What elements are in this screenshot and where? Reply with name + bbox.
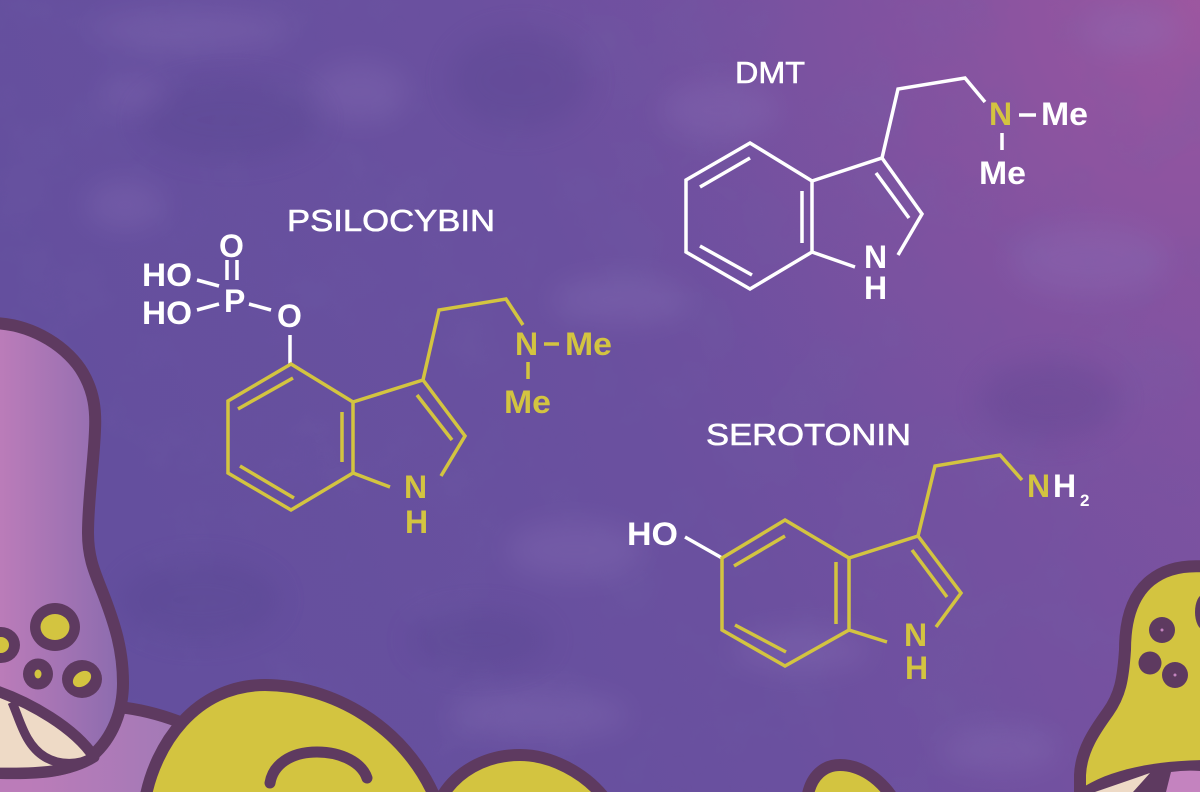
psilocybin phosphate bonds xyxy=(197,260,290,364)
right cap xyxy=(1080,566,1200,792)
DMT atoms: H xyxy=(864,270,887,306)
psilocybin ring and chain bonds xyxy=(228,299,559,510)
DMT atoms xyxy=(864,96,1088,306)
psilocybin phosphate atoms: P xyxy=(224,283,245,319)
psilocybin phosphate atoms: HO xyxy=(142,295,192,331)
serotonin atoms: N xyxy=(1027,468,1050,504)
DMT atoms: N xyxy=(989,96,1012,132)
mushroom: right yellow xyxy=(1080,566,1200,792)
DMT atoms: N xyxy=(864,239,887,275)
serotonin atoms: H xyxy=(1053,468,1076,504)
serotonin atoms: 2 xyxy=(1080,491,1089,510)
psilocybin atoms: H xyxy=(405,504,428,540)
mushroom: second yellow cap xyxy=(440,755,606,792)
smile mark xyxy=(270,752,367,783)
mushroom: large yellow cap xyxy=(145,685,436,792)
molecule: serotonin xyxy=(627,417,1089,686)
psilocybin atoms: N xyxy=(515,326,538,362)
psilocybin phosphate atoms xyxy=(142,228,302,334)
psilocybin atoms: N xyxy=(404,469,427,505)
psilocybin atoms: Me xyxy=(565,326,612,362)
DMT atoms: Me xyxy=(1041,96,1088,132)
label: psilocybin: PSILOCYBIN xyxy=(287,203,495,238)
label: serotonin: SEROTONIN xyxy=(706,417,911,452)
DMT ring and chain bonds xyxy=(686,78,1036,289)
serotonin hydroxyl bond xyxy=(685,537,722,558)
right spot dots xyxy=(1160,628,1176,676)
psilocybin atoms: Me xyxy=(504,384,551,420)
psilocybin phosphate atoms: HO xyxy=(142,257,192,293)
serotonin atoms xyxy=(627,468,1089,686)
psilocybin atoms xyxy=(404,326,612,540)
mushroom base body xyxy=(0,707,185,792)
mushroom gills xyxy=(0,690,94,773)
right cap spots xyxy=(1138,594,1200,688)
serotonin atoms: H xyxy=(905,650,928,686)
serotonin atoms: HO xyxy=(627,516,678,552)
psilocybin phosphate atoms: O xyxy=(219,228,244,264)
mushroom: small yellow cap xyxy=(807,765,894,792)
molecule: psilocybin xyxy=(142,203,612,540)
DMT atoms: Me xyxy=(979,155,1026,191)
right cap underside and stem xyxy=(1085,760,1200,792)
serotonin atoms: N xyxy=(904,617,927,653)
mushroom spots xyxy=(0,603,102,698)
mushroom purple cap xyxy=(0,323,123,773)
serotonin ring and chain bonds xyxy=(722,455,1022,666)
molecule: DMT xyxy=(686,55,1088,306)
psilocybin phosphate atoms: O xyxy=(277,298,302,334)
mushroom: left purple xyxy=(0,323,185,792)
label: DMT: DMT xyxy=(735,55,805,90)
